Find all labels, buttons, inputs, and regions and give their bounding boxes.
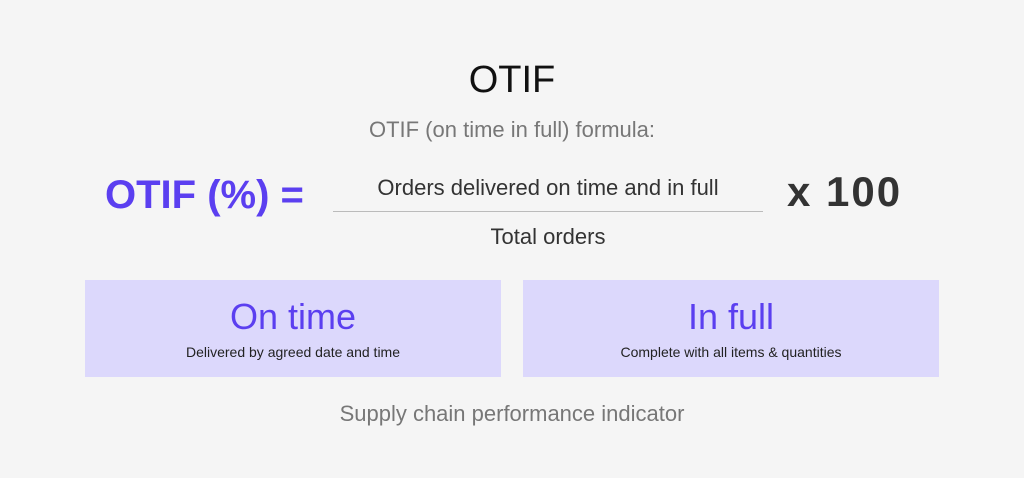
- footer: Supply chain performance indicator: [340, 401, 684, 426]
- panel: on time: On time: [230, 296, 356, 337]
- title: OTIF: [469, 59, 555, 101]
- formula label: OTIF (%) =: [105, 173, 304, 217]
- panel: on time: [85, 280, 501, 377]
- panel: in full: In full: [688, 296, 774, 337]
- numerator: Orders delivered on time and in full: [377, 175, 719, 200]
- multiplier: x 100: [787, 168, 902, 215]
- panel: in full: [523, 280, 939, 377]
- subtitle: OTIF (on time in full) formula:: [369, 117, 655, 142]
- panel: in full: Complete with all items & quantities: [620, 344, 842, 360]
- panel: on time: Delivered by agreed date and time: [186, 344, 400, 360]
- denominator: Total orders: [491, 224, 605, 249]
- formula: [105, 168, 902, 249]
